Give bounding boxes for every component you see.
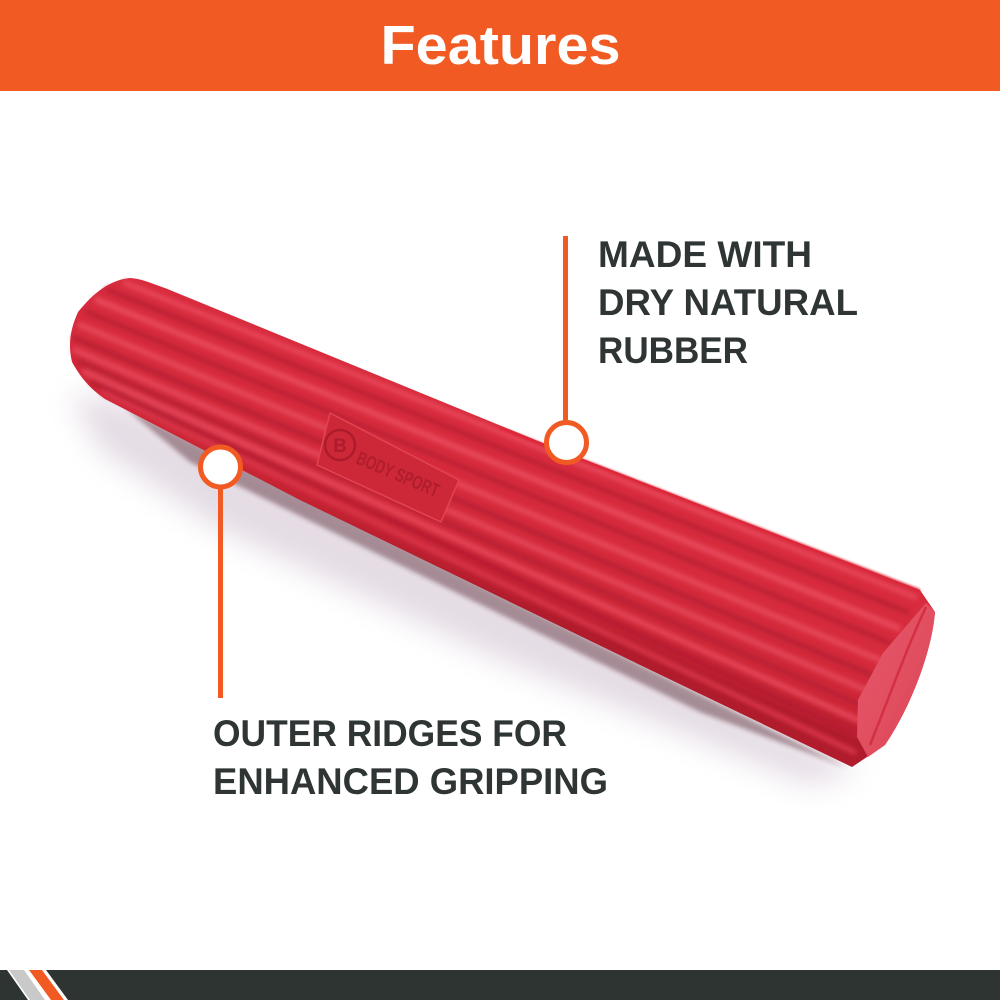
logo plate <box>317 413 459 522</box>
bright top rim <box>500 428 920 590</box>
callout: outer ridges <box>200 447 608 802</box>
header banner <box>0 0 1000 91</box>
logo letter: B <box>333 436 347 457</box>
callout: dry natural rubber <box>546 234 858 462</box>
product photo: red ridged flex bar <box>70 278 935 785</box>
callout text: RUBBER <box>598 330 748 371</box>
shadow <box>70 395 860 785</box>
callout marker <box>546 422 586 462</box>
logo wordmark: BODY SPORT <box>353 448 443 502</box>
footer stripes <box>7 970 68 1000</box>
callout text: MADE WITH <box>598 234 812 275</box>
title: Features <box>380 14 620 76</box>
footer bar <box>0 970 1000 1000</box>
callout text <box>598 234 858 371</box>
callout text: OUTER RIDGES FOR <box>213 713 567 754</box>
callout line <box>563 236 568 426</box>
callout marker <box>200 447 240 487</box>
end face <box>857 603 935 757</box>
tube body <box>70 278 935 767</box>
callout text: ENHANCED GRIPPING <box>213 761 608 802</box>
callout line <box>218 485 223 698</box>
ridges <box>75 283 915 752</box>
callout text: DRY NATURAL <box>598 282 858 323</box>
logo badge <box>325 430 355 460</box>
callout text <box>213 713 608 802</box>
end face seam <box>870 607 926 745</box>
